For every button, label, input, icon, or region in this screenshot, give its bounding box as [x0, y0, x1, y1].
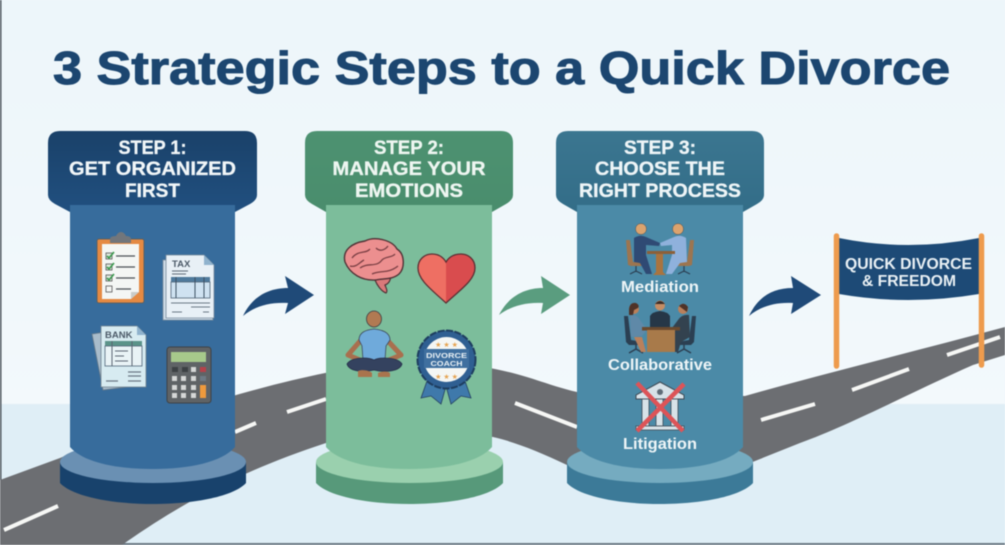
pillar: step 2 [305, 131, 513, 504]
finish banner [836, 236, 982, 366]
pillar 1 header: STEP 1: [118, 138, 186, 159]
finish banner: & FREEDOM [862, 273, 956, 290]
icon: bank statement: BANK [105, 330, 133, 341]
icon: crossed-out courthouse [636, 382, 684, 431]
arrow: step 1 to step 2 [243, 276, 314, 316]
pillar 2 base [316, 462, 503, 504]
arrow: step 3 to finish [749, 276, 821, 316]
pillar 3 rim [567, 441, 753, 483]
pillar: step 3 [556, 131, 764, 504]
pillar: step 1 [48, 131, 257, 504]
icon: divorce coach badge [418, 330, 476, 404]
banner posts [836, 236, 982, 366]
pillar 3 header [556, 131, 764, 212]
pillar 3 header: STEP 3: [624, 138, 696, 159]
pillar 3 body [577, 205, 743, 469]
pillar 3 header: RIGHT PROCESS [579, 181, 741, 202]
label: Mediation: Mediation [621, 279, 699, 296]
pillar 1 rim [60, 441, 246, 483]
icon: divorce coach badge: ★ ★ ★ [435, 341, 458, 349]
icon: collaborative table [624, 300, 696, 353]
pillar 3 base [567, 462, 753, 504]
pillar 2 header [305, 131, 513, 212]
icon: divorce coach badge: ★ ★ ★ [435, 373, 458, 381]
pillar 2 header: STEP 2: [374, 138, 444, 159]
pillar 2 body [326, 205, 492, 469]
pillar 2 rim [316, 441, 503, 483]
icon: mediation handshake [626, 224, 694, 275]
pillar 2 header: EMOTIONS [355, 181, 463, 202]
title: 3 Strategic Steps to a Quick Divorce [53, 42, 950, 94]
icon: heart [418, 254, 475, 303]
icon: checklist clipboard [97, 232, 144, 303]
icon: divorce coach badge: DIVORCE [426, 351, 467, 360]
banner text: QUICK DIVORCE [845, 256, 972, 273]
road [0, 327, 1005, 545]
icon: tax form: TAX [172, 259, 191, 270]
label: Litigation: Litigation [623, 436, 697, 453]
banner cloth [839, 238, 979, 300]
icon: calculator [167, 347, 211, 403]
icon: bank statement [92, 326, 146, 390]
pillar 1 header: GET ORGANIZED [69, 159, 236, 180]
icon: divorce coach badge: COACH [430, 359, 462, 368]
pillar 1 body [70, 205, 235, 469]
pillar 1 base [60, 462, 246, 504]
arrow: step 2 to step 3 [499, 276, 570, 315]
pillar 2 header: MANAGE YOUR [332, 159, 486, 180]
icon: brain [344, 239, 403, 293]
pillar 1 header: FIRST [125, 181, 180, 202]
pillar 3 header: CHOOSE THE [595, 159, 725, 180]
icon: meditating person [347, 311, 402, 377]
label: Collaborative: Collaborative [608, 357, 712, 374]
pillar 1 header [48, 131, 257, 212]
icon: tax form [163, 255, 214, 320]
